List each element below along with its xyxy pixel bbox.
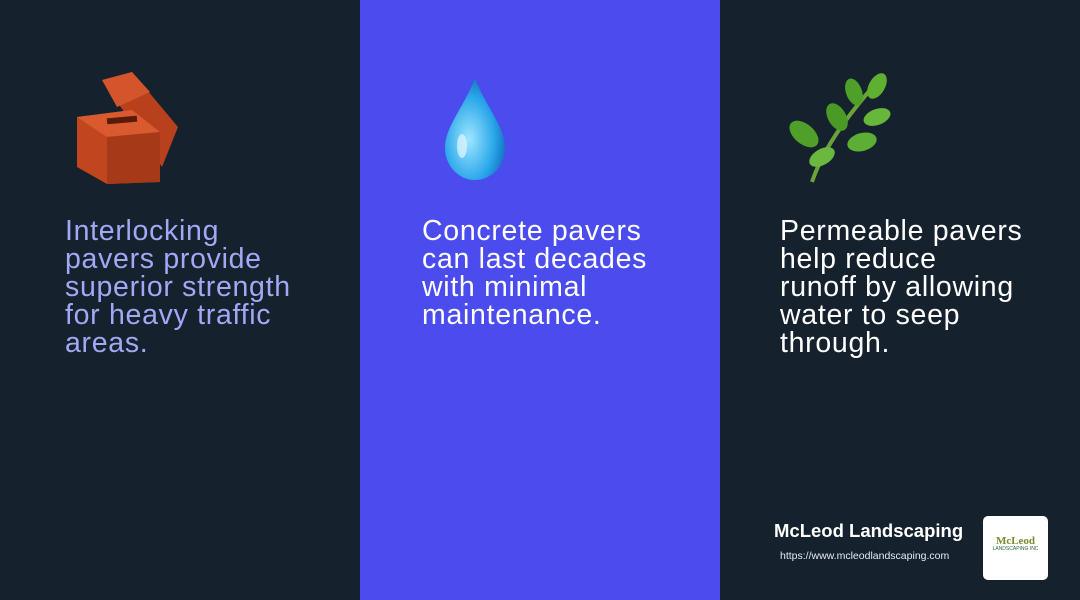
panel: middle <box>360 0 720 600</box>
text: permeable pavers: help reduce <box>780 243 937 275</box>
brand name: McLeod Landscaping <box>774 520 963 541</box>
text: concrete pavers <box>422 215 647 331</box>
text: interlocking pavers: areas. <box>65 327 148 359</box>
logo <box>983 516 1048 580</box>
text: interlocking pavers: Interlocking <box>65 215 219 247</box>
text: permeable pavers: runoff by allowing <box>780 271 1014 303</box>
text: concrete pavers: Concrete pavers <box>422 215 642 247</box>
text: interlocking pavers: superior strength <box>65 271 291 303</box>
brand url: https://www.mcleodlandscaping.com <box>780 550 949 562</box>
icon: bricks <box>77 72 178 184</box>
icon: leaf sprig <box>790 73 890 183</box>
text: permeable pavers: water to seep <box>780 299 960 331</box>
text: concrete pavers: with minimal <box>422 271 587 303</box>
logo: McLeod <box>996 535 1035 547</box>
text: permeable pavers: Permeable pavers <box>780 215 1022 247</box>
text: permeable pavers: through. <box>780 327 890 359</box>
text: interlocking pavers: for heavy traffic <box>65 299 271 331</box>
text: permeable pavers <box>780 215 1022 359</box>
icon: water drop <box>445 78 505 180</box>
text: interlocking pavers <box>65 215 291 359</box>
panel: left <box>0 0 360 600</box>
text: concrete pavers: maintenance. <box>422 299 602 331</box>
text: interlocking pavers: pavers provide <box>65 243 262 275</box>
logo: LANDSCAPING INC <box>993 546 1038 552</box>
text: concrete pavers: can last decades <box>422 243 647 275</box>
panel: right <box>720 0 1080 600</box>
